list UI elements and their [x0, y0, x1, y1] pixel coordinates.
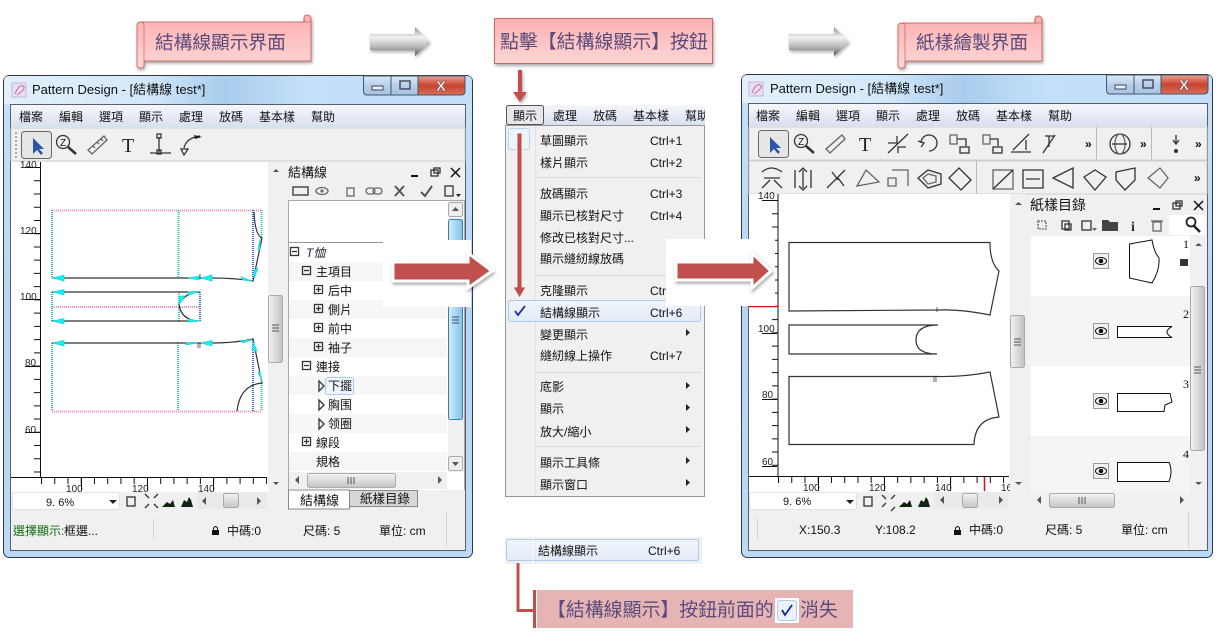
pattern thumbnails: 4 [1183, 447, 1189, 461]
structure tree: 袖子 [328, 340, 352, 355]
menu bar strip: 放碼 [593, 108, 617, 123]
label: pattern drawing: 紙樣繪製界面 [916, 32, 1028, 53]
zoom control: 9. 6% [46, 497, 74, 509]
toolbar row 1: » [1085, 137, 1092, 151]
menu items: Ctrl+5 [650, 284, 683, 298]
title bar: Pattern Design - [結構線 test*] [32, 82, 205, 97]
menu bar strip: 顯示 [513, 109, 537, 123]
horizontal ruler: 140 [935, 483, 952, 494]
status bar: X:150.3 [799, 523, 841, 537]
menu items: Ctrl+4 [650, 209, 683, 223]
menu bar: 幫助 [311, 109, 335, 124]
arrow: gray second [789, 27, 849, 56]
horizontal ruler: 100 [803, 483, 820, 494]
menu bar: 處理 [916, 109, 940, 123]
dock panel: pattern list: 紙樣目錄 [1030, 197, 1086, 213]
status bar [13, 512, 446, 548]
structure tree: 線段 [316, 435, 340, 450]
pattern pieces [789, 242, 999, 444]
title bar: Pattern Design - [結構線 test*] [770, 81, 943, 96]
structure tree: 規格 [316, 454, 340, 469]
pattern pieces: I [936, 307, 938, 314]
pattern list toolbar: i [1131, 220, 1135, 235]
list scrollbars [1031, 236, 1206, 509]
vertical ruler: 100 [758, 324, 775, 335]
structure tree: 领圈 [328, 417, 352, 431]
unchecked menu row [505, 537, 702, 564]
vertical ruler: 120 [20, 226, 37, 237]
menu bar [749, 104, 1207, 126]
toolbar: Z [60, 138, 66, 149]
status bar: 單位: cm [379, 523, 426, 538]
unchecked menu row: 結構線顯示 [538, 543, 598, 558]
vertical ruler: 60 [25, 425, 37, 436]
red arrow behind first [383, 240, 492, 307]
horizontal ruler: 120 [869, 483, 886, 494]
menu separators [536, 178, 701, 446]
zoom control [750, 492, 1008, 511]
label: structure-line view [137, 15, 311, 68]
structure tree: 連接 [316, 359, 340, 374]
toolbar row 1: » [1195, 137, 1202, 151]
label: click button instruction: 點擊【結構線顯示】按鈕 [500, 31, 708, 53]
callout: check mark disappears [533, 590, 853, 628]
connector line [518, 563, 534, 610]
window buttons [1106, 75, 1208, 94]
pattern pieces with structure lines: II [197, 343, 201, 350]
menu items: 縫紉線上操作 [540, 348, 612, 363]
status bar: 框選... [64, 524, 98, 538]
menu items: 修改已核對尺寸... [540, 230, 634, 245]
menu items: 樣片顯示 [540, 155, 588, 170]
menu bar: 基本樣 [259, 109, 295, 124]
pattern list toolbar [1038, 215, 1206, 235]
label: pattern drawing [898, 16, 1042, 68]
drawing canvas [11, 162, 268, 477]
menu bar: 幫助 [1048, 108, 1072, 123]
menu items [540, 134, 683, 492]
tabs: 紙樣目錄 [360, 491, 410, 506]
canvas scrollbar [268, 162, 283, 492]
unchecked menu row: Ctrl+6 [648, 544, 681, 558]
highlight check boxes [508, 128, 530, 150]
eye toggles [1094, 254, 1108, 478]
horizontal ruler: 120 [132, 484, 149, 495]
menu items: Ctrl+2 [650, 156, 683, 170]
window buttons: X [436, 78, 446, 95]
status bar: 單位: cm [1121, 522, 1168, 537]
pattern thumbnails: 1 [1183, 237, 1189, 251]
status bar: Y:108.2 [875, 523, 916, 537]
dock panel: structure lines [288, 165, 465, 510]
status bar: 選擇顯示: [13, 523, 64, 538]
menu items: 放碼顯示 [540, 186, 588, 201]
menu bar: 顯示 [876, 109, 900, 123]
menu items: Ctrl+7 [650, 349, 683, 363]
menu bar: 選項 [99, 110, 123, 124]
window: structure-line interface [4, 76, 472, 558]
menu items: 克隆顯示 [540, 283, 588, 298]
dock panel: pattern list [1030, 197, 1206, 509]
status bar: 中碼:0 [227, 523, 261, 538]
client area [748, 104, 1208, 550]
status bar: 尺碼: 5 [1045, 523, 1083, 537]
pattern pieces with structure lines: I [199, 274, 201, 281]
pattern thumbnails [1118, 237, 1189, 482]
structure tree: 胸围 [328, 398, 352, 412]
pattern thumbnails: 3 [1183, 377, 1189, 391]
callout: check mark disappears: 消失 [800, 599, 838, 621]
tabs: 結構線 [300, 493, 339, 508]
vertical ruler: 60 [762, 457, 774, 468]
menu items: Ctrl+3 [650, 187, 683, 201]
submenu arrows [686, 329, 690, 486]
dock toolbar icons [293, 186, 461, 197]
horizontal ruler [749, 476, 1013, 494]
menu bar: 放碼 [956, 108, 980, 123]
toolbar row 1: T [859, 134, 871, 156]
tabs [288, 490, 465, 510]
menu bar: 放碼 [219, 109, 243, 124]
menu items: 顯示 [540, 402, 564, 416]
arrow: down to menu [513, 70, 527, 102]
horizontal ruler [11, 478, 268, 495]
horizontal ruler: 16 [1001, 483, 1013, 494]
toolbar [11, 128, 465, 161]
structure tree: T恤 [306, 246, 326, 260]
menu bar: 基本樣 [996, 108, 1032, 123]
vertical ruler: 80 [25, 358, 37, 369]
toolbar row 1: Z [798, 137, 804, 148]
title bar [4, 76, 472, 104]
menu bar [11, 105, 465, 127]
drop-down body [506, 126, 704, 496]
toolbar row 1: » [1140, 137, 1147, 151]
title bar [742, 75, 1212, 103]
zoom control [12, 492, 267, 510]
horizontal ruler: 100 [66, 484, 83, 495]
menu bar: 編輯 [796, 109, 820, 123]
menu items: 顯示已核對尺寸 [540, 209, 624, 223]
pattern pieces: II [933, 377, 937, 384]
menu bar: 處理 [179, 110, 203, 124]
menu bar: 顯示 [139, 110, 163, 124]
menu items: 放大/縮小 [540, 424, 591, 439]
menu items: 變更顯示 [540, 327, 588, 342]
menu bar strip: 基本樣 [633, 108, 669, 123]
toolbar row 2 [749, 161, 1207, 194]
highlighted row [508, 300, 700, 322]
status bar [758, 512, 1188, 548]
structure tree [288, 200, 464, 490]
window buttons: X [1179, 77, 1189, 94]
structure tree: 側片 [328, 303, 352, 317]
menu items: Ctrl+1 [650, 134, 683, 148]
menu bar: 檔案 [756, 109, 780, 123]
window frame [742, 74, 1212, 558]
menu items: 結構線顯示 [540, 305, 600, 320]
callout: check mark disappears: 【結構線顯示】按鈕前面的 [547, 599, 774, 621]
menu bar strip: 幫助 [685, 108, 709, 123]
arrow: gray first [370, 27, 430, 56]
menu bar strip: 處理 [553, 109, 577, 123]
window: pattern drawing interface [742, 74, 1212, 558]
vertical ruler [749, 191, 778, 491]
window buttons [364, 76, 465, 95]
structure tree: 主項目 [316, 265, 352, 279]
structure tree: 前中 [328, 321, 352, 336]
menu items: 底影 [540, 379, 564, 394]
structure tree: 下擺 [328, 378, 352, 393]
status bar: 中碼:0 [969, 522, 1003, 537]
check icon [775, 598, 799, 623]
pattern thumbnails: 2 [1183, 307, 1189, 321]
dock panel: structure lines: 結構線 [288, 165, 327, 180]
zoom control: 9. 6% [783, 496, 811, 508]
horizontal ruler: 140 [198, 484, 215, 495]
window frame [4, 76, 472, 558]
toolbar row 2: » [1194, 171, 1201, 185]
menu bar strip [506, 105, 711, 125]
status bar: 尺碼: 5 [303, 524, 341, 538]
menu items: Ctrl+6 [650, 306, 683, 320]
menu items: 顯示縫紉線放碼 [540, 251, 624, 266]
tree scrollbars [289, 201, 464, 489]
vertical ruler: 80 [762, 390, 774, 401]
drawing canvas [749, 194, 1010, 477]
menu bar: 檔案 [19, 110, 43, 124]
check mark [515, 306, 525, 315]
menu bar: 選項 [836, 109, 860, 123]
canvas scrollbar [1010, 194, 1026, 492]
menu items: 草圖顯示 [540, 134, 588, 148]
label: click button instruction [494, 18, 712, 64]
arrow: down menu [513, 133, 526, 298]
label: structure-line view: 結構線顯示界面 [155, 32, 286, 53]
vertical ruler [20, 160, 40, 492]
client area [10, 104, 466, 550]
toolbar row 1 [749, 127, 1207, 160]
menu items: 顯示工具條 [540, 456, 600, 470]
red arrow second [666, 239, 775, 306]
vertical ruler: 100 [20, 292, 37, 303]
structure tree: 后中 [328, 283, 352, 298]
toolbar: T [122, 135, 134, 157]
pattern pieces with structure lines [52, 210, 262, 412]
pattern list [1031, 236, 1190, 492]
menu items: 顯示窗口 [540, 478, 588, 492]
vertical ruler: 140 [758, 191, 775, 202]
menu screenshot [506, 105, 711, 496]
menu bar: 編輯 [59, 110, 83, 124]
vertical ruler: 140 [20, 160, 37, 171]
